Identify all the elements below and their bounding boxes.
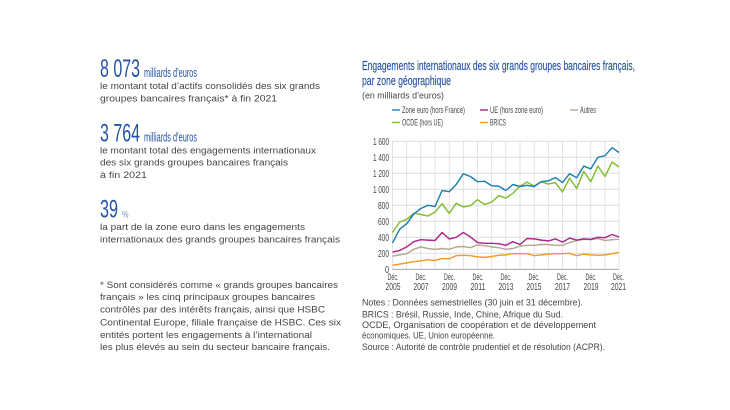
notes and source: Source : Autorité de contrôle prudentiel et de résolution (ACPR). [362, 341, 605, 352]
legend item: Zone euro [392, 105, 465, 115]
x axis labels: 2009 [442, 281, 457, 293]
y axis labels [373, 136, 389, 276]
description: euro area share [100, 222, 340, 246]
x axis labels: Déc. [557, 272, 568, 282]
footnote: les plus élevés au sein du secteur bancaire français. [100, 342, 330, 353]
description: euro area share: la part de la zone euro dans les engagements [100, 222, 305, 233]
legend item: Zone euro: Zone euro (hors France) [402, 105, 465, 115]
description: international commitments: des six grands groupes bancaires français [100, 158, 288, 168]
notes and source: BRICS : Brésil, Russie, Inde, Chine, Afrique du Sud. [362, 308, 563, 319]
series: Autres [392, 238, 619, 256]
footnote [100, 280, 341, 353]
legend item: Autres [570, 105, 596, 115]
legend item: OCDE: OCDE (hors UE) [402, 118, 443, 128]
legend item: UE [480, 105, 543, 115]
x axis labels: 2017 [555, 281, 570, 293]
series: UE [392, 232, 619, 252]
x axis labels: Déc. [500, 272, 512, 282]
chart title [362, 58, 635, 88]
legend item: BRICS: BRICS [490, 118, 506, 128]
x axis labels: 2013 [498, 281, 514, 293]
description: international commitments: le montant total des engagements internationaux [100, 145, 316, 156]
description: total assets [100, 81, 320, 104]
x axis labels: 2007 [414, 281, 429, 293]
y axis labels: 400 [378, 232, 389, 244]
number: 3 764: 3 764 [100, 120, 140, 148]
x axis labels: 2015 [526, 281, 542, 293]
x axis labels: Déc. [613, 272, 624, 282]
footnote: * Sont considérés comme « grands groupes bancaires [100, 280, 338, 291]
x axis labels: Déc. [528, 272, 540, 282]
legend item: BRICS [480, 118, 506, 128]
number: 8 073: 8 073 [100, 55, 140, 83]
x axis labels: Déc. [416, 272, 426, 282]
notes and source: OCDE, Organisation de coopération et de développement [362, 319, 596, 330]
unit: milliards d'euros: milliards d’euros [144, 131, 197, 145]
description: total assets: le montant total d’actifs consolidés des six grands [100, 81, 320, 92]
series: BRICS [392, 252, 619, 265]
y axis labels: 1 600 [373, 136, 389, 148]
unit: percent: % [122, 210, 129, 221]
line chart [373, 136, 626, 293]
y axis labels: 200 [378, 248, 389, 260]
y axis labels: 600 [378, 216, 389, 228]
key figure: international commitments [100, 120, 316, 181]
series: OCDE [392, 162, 619, 232]
notes and source: Notes : Données semestrielles (30 juin et 31 décembre). [362, 297, 583, 308]
legend [392, 105, 596, 128]
footnote: français » les cinq principaux groupes bancaires [100, 292, 315, 303]
x axis labels: 2021 [611, 281, 626, 293]
x axis labels: Déc. [444, 272, 455, 282]
footnote: Continental Europe, filiale française de HSBC. Ces six [100, 318, 341, 328]
notes and source [362, 297, 605, 352]
notes and source: économiques. UE, Union européenne. [362, 330, 495, 340]
description: international commitments: à fin 2021 [100, 170, 147, 181]
unit: milliards d'euros: milliards d’euros [144, 66, 197, 80]
number: 39: 39 [100, 196, 118, 224]
legend item: UE: UE (hors zone euro) [490, 105, 543, 115]
y axis labels: 1 400 [373, 152, 389, 164]
x axis labels [386, 272, 626, 293]
legend item: Autres: Autres [580, 105, 596, 115]
x axis labels: 2019 [584, 281, 599, 293]
series: Zone euro [392, 148, 619, 243]
y axis labels: 1 200 [373, 168, 389, 180]
key figure: total assets [100, 55, 320, 104]
y axis labels: 0 [385, 264, 389, 276]
y axis labels: 1 000 [373, 184, 389, 196]
y axis labels: 800 [378, 200, 389, 212]
description: euro area share: internationaux des grands groupes bancaires français [100, 235, 340, 246]
key figure: euro area share [100, 196, 340, 246]
footnote: contrôlés par des intérêts français, ainsi que HSBC [100, 304, 325, 316]
chart subtitle: unit: (en milliards d’euros) [362, 89, 444, 100]
x axis labels: 2011 [470, 281, 486, 293]
x axis labels: Déc. [388, 272, 398, 282]
series lines [392, 148, 619, 265]
description: total assets: groupes bancaires français* à fin 2021 [100, 94, 277, 104]
footnote: entités portent les engagements à l’international [100, 330, 312, 341]
description: international commitments [100, 145, 316, 181]
x axis labels: Déc. [472, 272, 484, 282]
chart title: par zone géographique [362, 73, 451, 88]
x axis labels: 2005 [386, 281, 401, 293]
legend item: OCDE [392, 118, 443, 128]
x axis labels: Déc. [586, 272, 596, 282]
